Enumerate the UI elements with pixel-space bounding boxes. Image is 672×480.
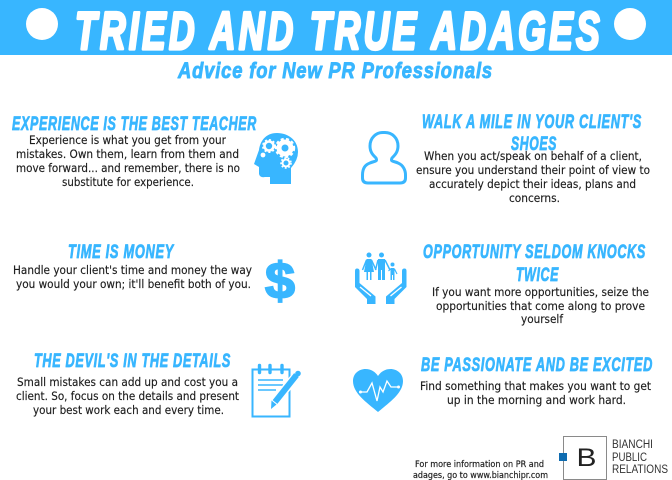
text: walk a mile: ensure you understand their point of view to xyxy=(416,163,650,177)
text: experience: move forward... and remember, there is no xyxy=(16,161,240,175)
text: experience: substitute for experience. xyxy=(62,175,194,189)
text: opportunity: If you want more opportunities, seize the xyxy=(432,285,649,299)
text: walk a mile xyxy=(416,149,650,205)
text: experience: mistakes. Own them, learn from them and xyxy=(16,147,239,161)
heading: opportunity xyxy=(423,242,646,286)
text: time is money: you would your own; it'll benefit both of you. xyxy=(16,277,251,291)
text: walk a mile: concerns. xyxy=(509,191,560,205)
text: walk a mile: accurately depict their ideas, plans and xyxy=(429,177,636,191)
heading: walk a mile: SHOES xyxy=(511,134,557,155)
logo: Bianchi Public Relations xyxy=(559,436,668,480)
logo: Bianchi Public Relations: B xyxy=(576,444,596,472)
logo: Bianchi Public Relations: BIANCHI xyxy=(612,439,653,451)
panel: walk a mile xyxy=(416,112,650,205)
heading: opportunity: TWICE xyxy=(516,265,559,286)
text: devil in the details: your best work each and every time. xyxy=(33,403,224,417)
panel: devil in the details xyxy=(16,351,239,417)
text: opportunity: yourself xyxy=(521,312,564,326)
panel: opportunity xyxy=(423,242,649,326)
text: time is money: Handle your client's time and money the way xyxy=(13,263,252,277)
text: opportunity xyxy=(432,285,649,326)
logo: Bianchi Public Relations: PUBLIC xyxy=(612,452,647,464)
footer note: For more information on PR and xyxy=(415,460,544,470)
icon: person outline xyxy=(362,132,406,183)
panel: time is money xyxy=(13,242,252,291)
text: devil in the details: client. So, focus on the details and present xyxy=(16,389,239,403)
icon: head with gears xyxy=(254,133,298,184)
heading: time is money: TIME IS MONEY xyxy=(68,242,175,263)
text: devil in the details xyxy=(16,375,239,417)
text: experience: Experience is what you get from your xyxy=(29,133,226,147)
panel: be passionate xyxy=(420,355,653,407)
text: be passionate: Find something that makes you want to get xyxy=(420,379,651,393)
icon: heart with pulse xyxy=(353,369,403,412)
heading: walk a mile xyxy=(422,112,642,155)
text: time is money xyxy=(13,263,252,291)
text: be passionate xyxy=(420,379,651,407)
heading: experience: EXPERIENCE IS THE BEST TEACHER xyxy=(12,114,257,135)
text: opportunity: opportunities that come along to prove xyxy=(436,299,645,313)
subtitle: Advice for New PR Professionals xyxy=(177,58,493,83)
text: be passionate: up in the morning and work hard. xyxy=(447,393,626,407)
footer note xyxy=(413,460,548,480)
text: walk a mile: When you act/speak on behalf of a client, xyxy=(424,149,642,163)
title banner xyxy=(0,0,672,61)
panel: experience xyxy=(12,114,257,189)
text: devil in the details: Small mistakes can add up and cost you a xyxy=(17,375,238,389)
icon: notepad and pencil xyxy=(252,366,301,416)
icon: family in hands xyxy=(355,252,406,304)
heading: devil in the details: THE DEVIL'S IN THE DETAILS xyxy=(34,351,231,372)
text: experience xyxy=(16,133,240,189)
icon: dollar sign: $ xyxy=(265,252,295,309)
